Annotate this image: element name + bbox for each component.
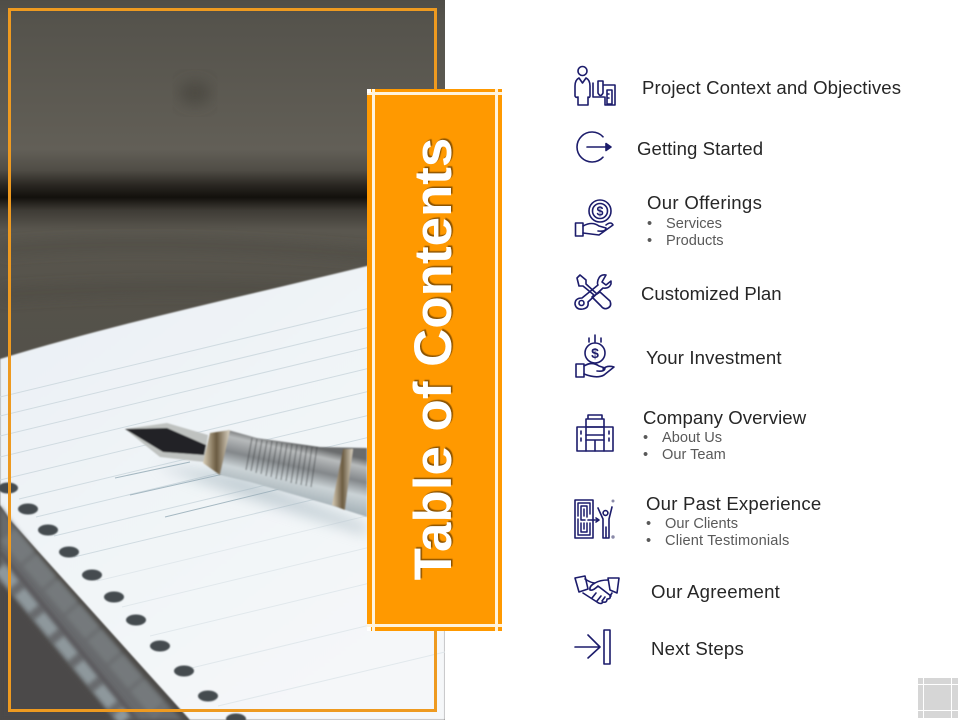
fountain pen <box>125 423 367 517</box>
text: Project Context and Objectives: Project Context and Objectives <box>642 77 901 98</box>
title: Table of Contents <box>404 138 463 580</box>
text: Our Offerings with list: Products <box>666 233 724 249</box>
text: Your Investment: Your Investment <box>646 347 782 368</box>
pen shadow <box>155 465 367 535</box>
paper sheet <box>0 246 445 720</box>
text: Our Offerings with list: • <box>647 233 652 249</box>
text: Company Overview with list: • <box>643 430 648 446</box>
icon: coin in hand: $ <box>597 204 604 218</box>
text: Our Past Experience with list: Our Past Experience <box>646 493 821 514</box>
text: Company Overview with list <box>643 407 806 463</box>
text: Company Overview with list: • <box>643 447 648 463</box>
text: Our Agreement: Our Agreement <box>651 581 780 602</box>
spiral holes <box>0 482 246 720</box>
text: Our Offerings with list <box>647 192 762 249</box>
text: Our Past Experience with list <box>646 493 821 549</box>
text: Our Offerings with list: Our Offerings <box>647 192 762 213</box>
text: Our Past Experience with list: Client Testimonials <box>665 533 789 549</box>
text: Getting Started: Getting Started <box>637 138 763 159</box>
text: Our Offerings with list: • <box>647 216 652 232</box>
text: Our Past Experience with list: Our Clients <box>665 516 738 532</box>
spiral binding band <box>0 505 183 720</box>
icon: watermark square <box>918 678 958 718</box>
panel: orange title banner <box>367 89 502 631</box>
text: Our Past Experience with list: • <box>646 533 651 549</box>
text: Company Overview with list: Our Team <box>662 447 726 463</box>
text: Next Steps: Next Steps <box>651 638 744 659</box>
text: Company Overview with list: Company Overview <box>643 407 806 428</box>
text: Company Overview with list: About Us <box>662 430 722 446</box>
frame: orange photo outline <box>8 8 437 712</box>
panel: notebook and fountain pen photo <box>0 0 445 720</box>
text: Customized Plan: Customized Plan <box>641 283 782 304</box>
text: Our Offerings with list: Services <box>666 216 722 232</box>
icon: dollar in hand: $ <box>591 345 599 361</box>
text: Our Past Experience with list: • <box>646 516 651 532</box>
